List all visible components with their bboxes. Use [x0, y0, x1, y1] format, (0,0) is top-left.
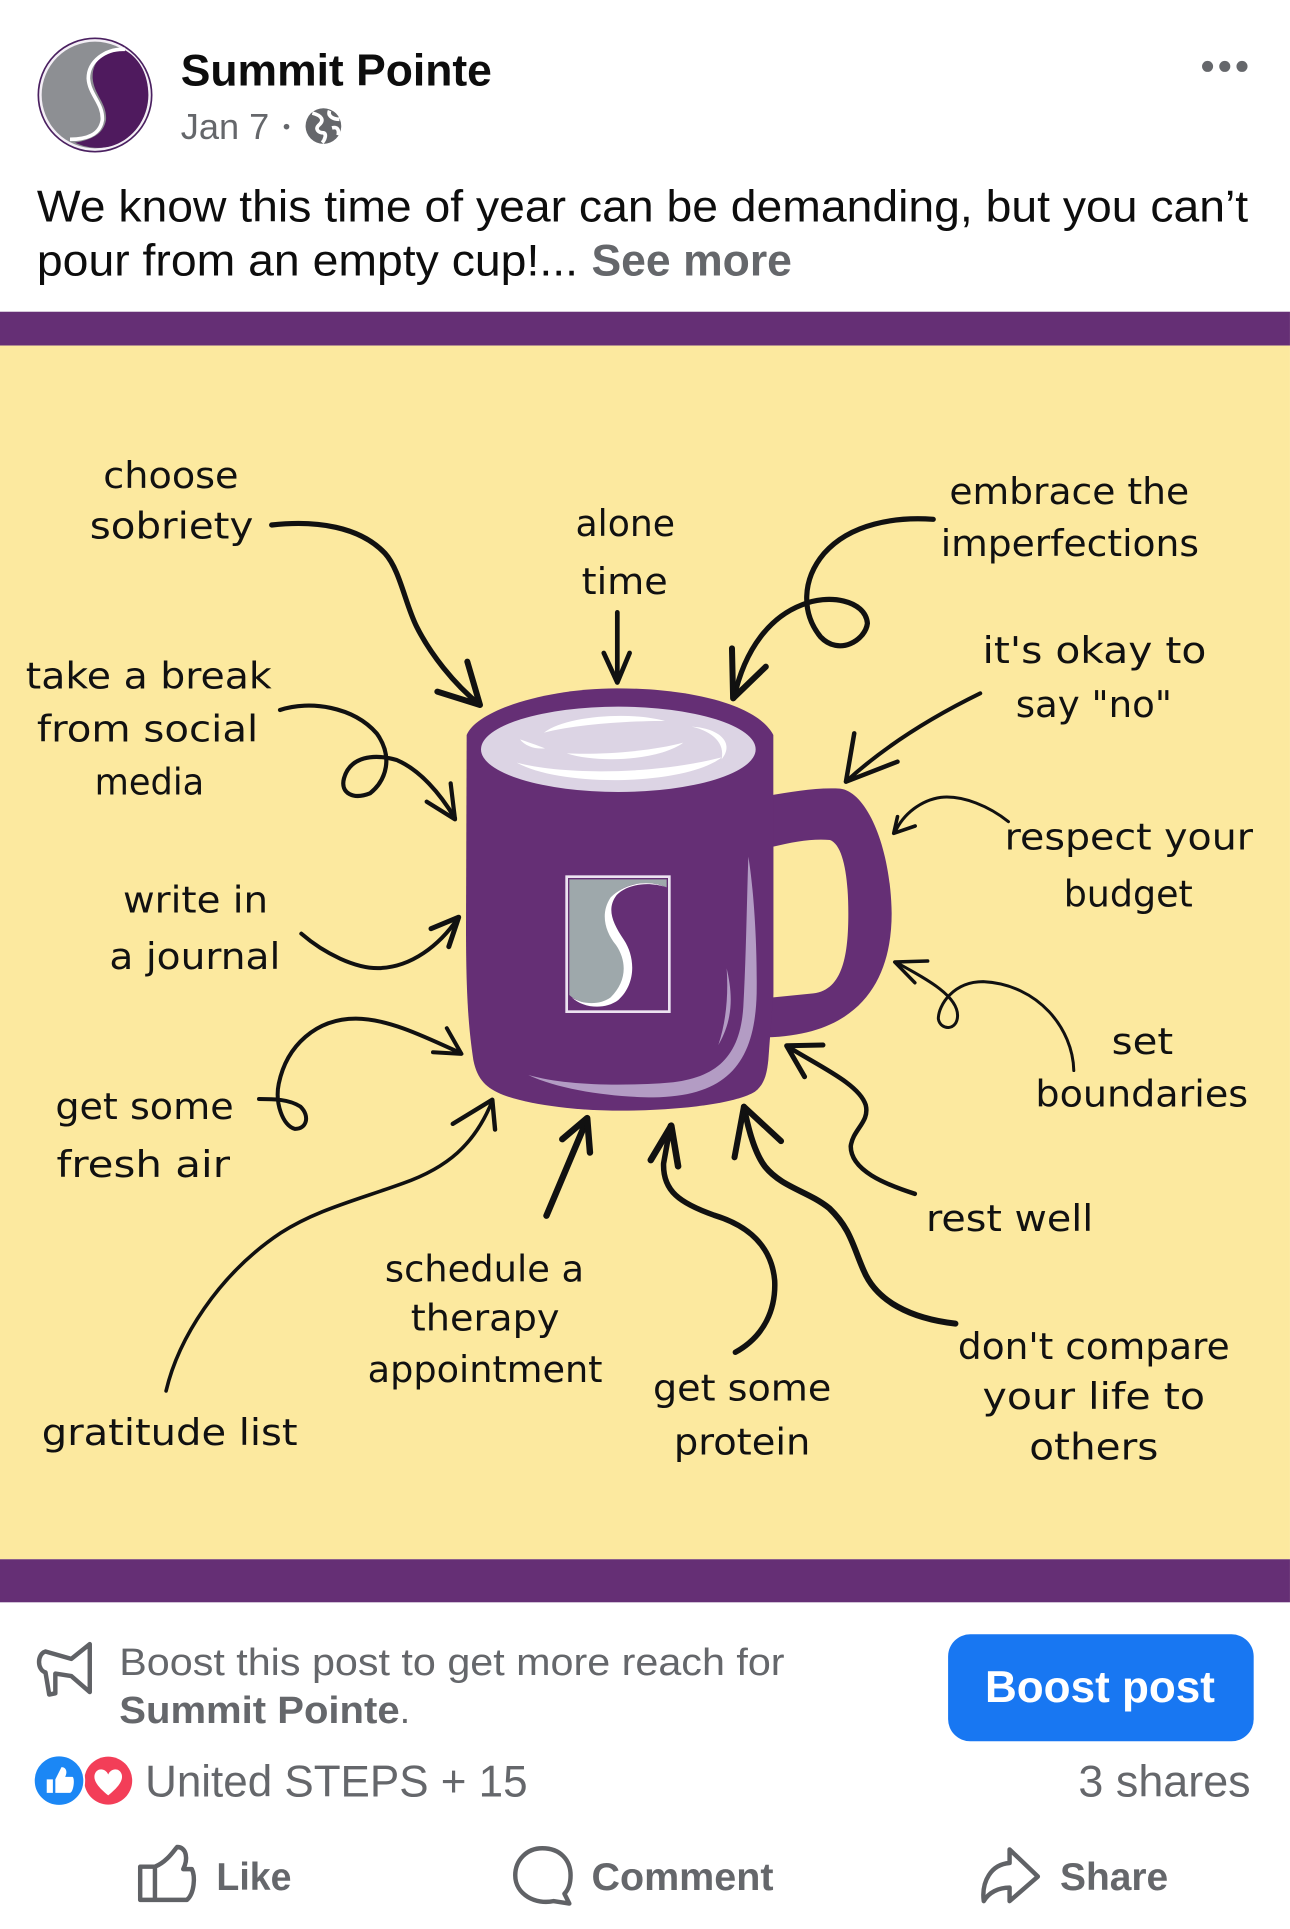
label: schedule a therapy appointment: appointment: [368, 1348, 603, 1391]
share action: [983, 1849, 1168, 1901]
icon: Summit Pointe avatar: [38, 38, 152, 152]
bottom purple band: [0, 1559, 1290, 1602]
label: write in a journal: [109, 878, 280, 978]
label: respect your budget: budget: [1064, 872, 1193, 915]
post header: [38, 38, 1248, 152]
label: take a break from social media: media: [95, 760, 204, 803]
boost post button: [948, 1634, 1254, 1741]
label: get some protein: protein: [674, 1421, 810, 1464]
label: get some fresh air: fresh air: [57, 1143, 231, 1186]
share count: 3 shares: [1078, 1758, 1251, 1807]
mug body: [466, 688, 773, 1111]
arrow: take a break from social media: [280, 706, 455, 819]
label: it's okay to say no: say "no": [1016, 683, 1172, 726]
label: write in a journal: a journal: [109, 935, 280, 978]
coffee surface: [481, 707, 756, 792]
label: embrace the imperfections: [941, 470, 1199, 565]
boost message: Boost this post to get more reach for: [119, 1641, 785, 1684]
label: schedule a therapy appointment: therapy: [411, 1297, 560, 1340]
label: set boundaries: set: [1112, 1020, 1173, 1063]
label: alone time: alone: [575, 502, 675, 545]
label: gratitude list: gratitude list: [42, 1411, 298, 1454]
arrow: embrace the imperfections: [732, 519, 933, 698]
post caption: We know this time of year can be demanding, but you can’t: [37, 182, 1248, 231]
label: take a break from social media: from social: [37, 708, 258, 751]
arrow: gratitude list: [166, 1100, 495, 1391]
label: schedule a therapy appointment: schedule a: [385, 1247, 584, 1290]
mug logo: [567, 877, 669, 1012]
mug handle: [767, 788, 892, 1037]
comment action: [515, 1848, 773, 1904]
arrow: write in a journal: [301, 917, 459, 968]
label: choose sobriety: [90, 454, 253, 548]
boost section: [39, 1634, 1254, 1741]
label: don't compare your life to others: don't compare: [958, 1325, 1230, 1368]
comment action: Comment: [591, 1855, 773, 1899]
label: respect your budget: [1005, 816, 1254, 915]
arrow: schedule a therapy appointment: [546, 1118, 590, 1216]
label: embrace the imperfections: imperfections: [941, 522, 1199, 565]
mug illustration: [466, 688, 892, 1111]
label: get some protein: get some: [653, 1367, 831, 1410]
arrow: get some fresh air: [259, 1019, 461, 1129]
like action: Like: [216, 1855, 291, 1899]
post caption: [37, 182, 1248, 285]
label: don't compare your life to others: others: [1029, 1426, 1158, 1469]
arrow: respect your budget: [894, 797, 1008, 833]
label: respect your budget: respect your: [1005, 816, 1254, 859]
label: schedule a therapy appointment: [368, 1247, 603, 1391]
label: don't compare your life to others: [958, 1325, 1230, 1469]
post date: Jan 7: [181, 107, 269, 147]
label: don't compare your life to others: your life to: [983, 1375, 1205, 1418]
boost post button: Boost post: [985, 1663, 1215, 1712]
label: it's okay to say no: it's okay to: [983, 629, 1206, 672]
page name: Summit Pointe: [181, 46, 492, 95]
label: get some fresh air: [55, 1085, 234, 1186]
share action: Share: [1060, 1855, 1168, 1899]
label: it's okay to say no: [983, 629, 1206, 726]
action bar: [140, 1847, 1168, 1904]
label: take a break from social media: take a break: [26, 655, 272, 698]
arrow: don't compare your life: [735, 1107, 955, 1324]
label: get some protein: [653, 1367, 831, 1464]
yellow background: [0, 346, 1290, 1559]
post caption: See more: [591, 236, 792, 285]
label: alone time: time: [582, 560, 668, 603]
like action: [140, 1847, 291, 1900]
label: get some fresh air: get some: [55, 1085, 234, 1128]
top purple band: [0, 312, 1290, 346]
label: rest well: rest well: [926, 1197, 1093, 1240]
reactions row: [34, 1755, 1251, 1807]
label: write in a journal: write in: [123, 878, 268, 921]
label: alone time: [575, 502, 675, 603]
arrow: get some protein: [651, 1126, 775, 1352]
arrow: it's okay to say no: [846, 693, 980, 782]
icon: more menu: [1202, 61, 1248, 72]
boost message: Summit Pointe .: [119, 1689, 410, 1732]
reaction names: United STEPS + 15: [145, 1758, 528, 1807]
label: choose sobriety: choose: [103, 454, 239, 497]
image panel: self care mug: [0, 312, 1290, 1602]
label: set boundaries: boundaries: [1035, 1073, 1248, 1116]
arrow: alone time: [604, 612, 630, 682]
arrow: rest well: [787, 1045, 915, 1194]
mug highlights: [528, 857, 757, 1097]
icon: globe: [306, 108, 341, 144]
icon: love reaction: [84, 1757, 132, 1805]
boost message: [119, 1641, 785, 1732]
icon: megaphone: [39, 1644, 90, 1695]
coffee highlights: [517, 716, 727, 780]
label: set boundaries: [1035, 1020, 1248, 1116]
arrow: set boundaries: [895, 961, 1074, 1071]
label: take a break from social media: [26, 655, 272, 803]
icon: like reaction: [34, 1755, 84, 1806]
arrow: choose sobriety: [272, 523, 480, 705]
label: choose sobriety: sobriety: [90, 505, 253, 548]
label: embrace the imperfections: embrace the: [949, 470, 1189, 513]
separator dot: [284, 124, 289, 129]
post caption: pour from an empty cup!...: [37, 236, 578, 285]
